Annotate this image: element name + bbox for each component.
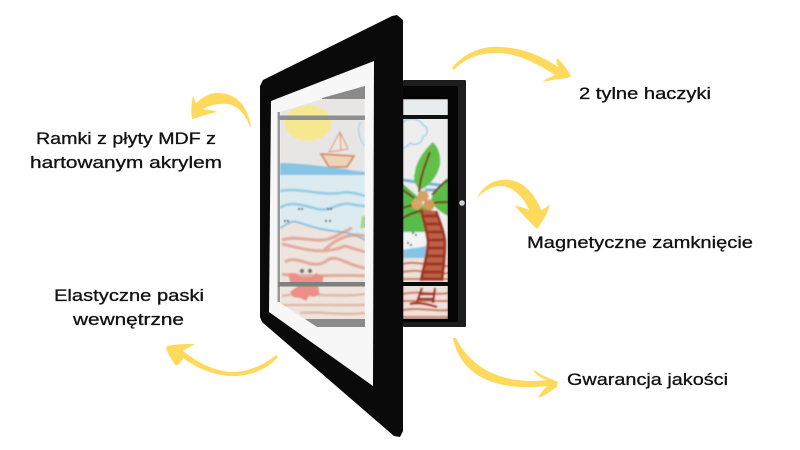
palm trunk [421, 209, 445, 281]
back panel of frame [403, 80, 466, 327]
label: Ramki z płyty MDF: hartowanym akrylem [30, 153, 222, 172]
arrow: middle right [477, 180, 550, 229]
sand [280, 222, 347, 236]
magnetic closure dot [459, 200, 465, 206]
palm fronds [414, 142, 440, 190]
label: Gwarancja jakości: Gwarancja jakości [567, 370, 728, 389]
arrow: bottom right [453, 338, 558, 398]
label: Ramki z płyty MDF: Ramki z płyty MDF z [36, 129, 216, 148]
front picture grey shadows and straps [278, 86, 365, 327]
label: Elastyczne paski wewnętrzne: Elastyczne paski [54, 286, 204, 305]
arrow: top right [452, 47, 571, 82]
crab [288, 273, 323, 301]
arrow: top left [191, 93, 251, 127]
label: Magnetyczne zamknięcie: Magnetyczne zamknięcie [527, 233, 753, 252]
right water and sand [403, 244, 428, 259]
label: Ramki z płyty MDF [30, 129, 222, 172]
left half of drawing: boat and sea [280, 95, 366, 320]
label: Elastyczne paski wewnętrzne: wewnętrzne [72, 310, 184, 329]
back panel retaining straps [403, 115, 448, 286]
arrow: bottom left [166, 344, 278, 376]
front frame [260, 15, 403, 437]
left water [280, 163, 365, 178]
white passe-partout mat [269, 61, 374, 386]
right half of drawing: palm tree [403, 99, 448, 319]
label: Elastyczne paski wewnętrzne [54, 286, 204, 329]
label: 2 tylne haczyki: 2 tylne haczyki [579, 84, 711, 103]
